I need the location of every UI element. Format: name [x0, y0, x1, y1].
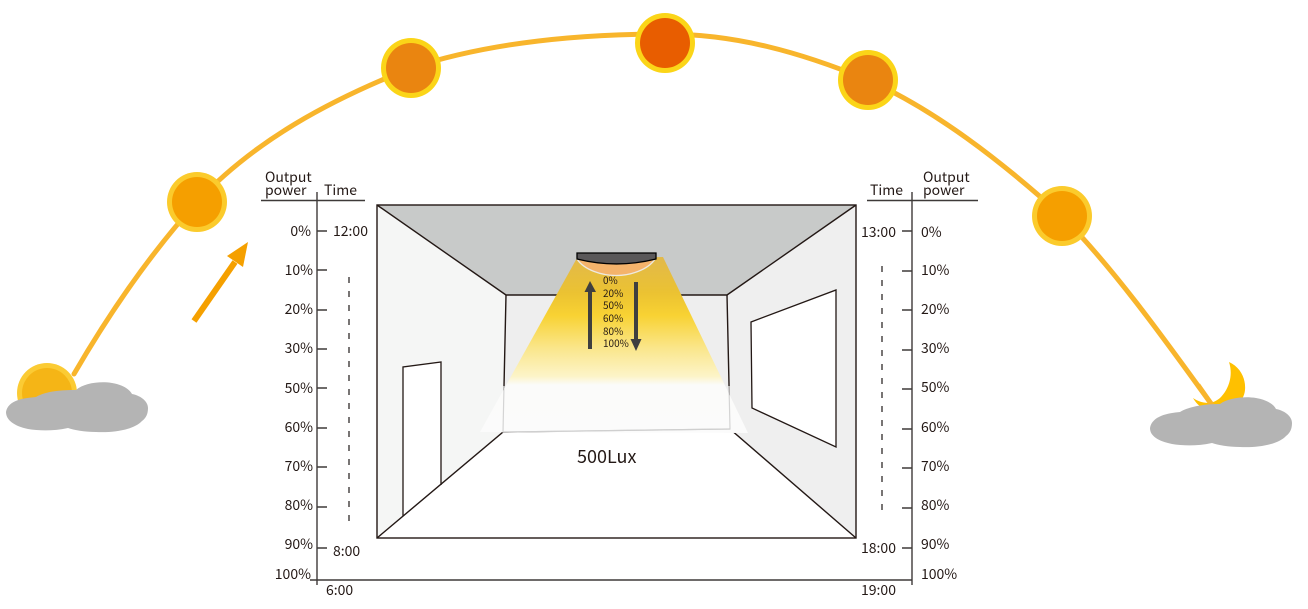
moon and cloud — [1150, 362, 1292, 447]
left time labels: 6:00 — [326, 580, 353, 600]
lamp output percentages: 60% — [603, 310, 623, 325]
light beam — [480, 257, 748, 433]
left axis headings: power — [265, 180, 307, 200]
left output power scale: 60% — [285, 417, 313, 437]
cloud: right — [1150, 397, 1292, 447]
right axis headings: power — [923, 180, 965, 200]
lamp output percentages: 0% — [603, 272, 618, 287]
right axis — [861, 167, 978, 600]
right axis headings: Output — [923, 167, 970, 187]
floor — [377, 429, 856, 538]
arrow: output decreasing — [630, 282, 642, 351]
arrow: sun rising direction — [194, 242, 248, 321]
left time labels: 12:00 — [333, 221, 368, 241]
sun: afternoon — [1032, 186, 1092, 246]
left output power scale: 80% — [285, 495, 313, 515]
sun: late morning — [381, 38, 441, 98]
left output power scale: 10% — [285, 260, 313, 280]
right time labels: 13:00 — [861, 222, 896, 242]
left axis headings — [265, 167, 357, 200]
left wall — [377, 205, 506, 538]
right time labels: 19:00 — [861, 580, 896, 600]
lamp output percentages — [603, 272, 629, 350]
sun path arc — [74, 34, 1212, 405]
right output power scale: 10% — [921, 260, 950, 280]
sun: morning — [167, 172, 227, 232]
right output power scale: 60% — [921, 417, 950, 437]
sun: sunrise behind cloud — [6, 363, 148, 432]
illuminance label: 500Lux — [577, 443, 636, 469]
room illustration — [377, 205, 856, 538]
right output power scale: 70% — [921, 456, 950, 476]
back wall — [503, 295, 730, 432]
right output power scale: 50% — [921, 377, 950, 397]
room edges — [377, 205, 856, 538]
right output power scale: 90% — [921, 534, 950, 554]
lamp output percentages: 80% — [603, 323, 623, 338]
right wall — [727, 205, 856, 538]
sun: early afternoon — [838, 50, 898, 110]
left output power scale: 20% — [285, 299, 313, 319]
ceiling light fixture — [577, 253, 656, 276]
left output power scale: 50% — [285, 378, 313, 398]
left time labels — [326, 221, 368, 600]
door — [403, 362, 441, 516]
left axis headings: Time — [324, 180, 357, 200]
left axis — [261, 167, 912, 600]
left output power scale: 100% — [275, 564, 311, 584]
lamp output percentages: 50% — [603, 297, 623, 312]
left output power scale — [275, 221, 313, 584]
right output power scale: 100% — [921, 564, 957, 584]
lamp output percentages: 20% — [603, 285, 623, 300]
left output power scale: 0% — [290, 221, 311, 241]
left output power scale: 30% — [285, 338, 313, 358]
right output power scale: 0% — [921, 222, 942, 242]
arrow: output increasing — [584, 281, 596, 349]
right output power scale: 30% — [921, 338, 950, 358]
left time labels: 8:00 — [333, 541, 360, 561]
right output power scale: 20% — [921, 299, 950, 319]
sun: noon — [635, 13, 695, 73]
left axis headings: Output — [265, 167, 312, 187]
lamp output percentages: 100% — [603, 335, 629, 350]
right time labels — [861, 222, 896, 600]
left output power scale: 90% — [285, 534, 313, 554]
right output power scale: 80% — [921, 495, 950, 515]
ceiling — [377, 205, 856, 295]
cloud: left — [6, 382, 148, 432]
right axis headings: Time — [870, 180, 903, 200]
right time labels: 18:00 — [861, 538, 896, 558]
right output power scale — [921, 222, 957, 584]
right axis headings — [870, 167, 970, 200]
left output power scale: 70% — [285, 456, 313, 476]
window — [751, 290, 836, 447]
